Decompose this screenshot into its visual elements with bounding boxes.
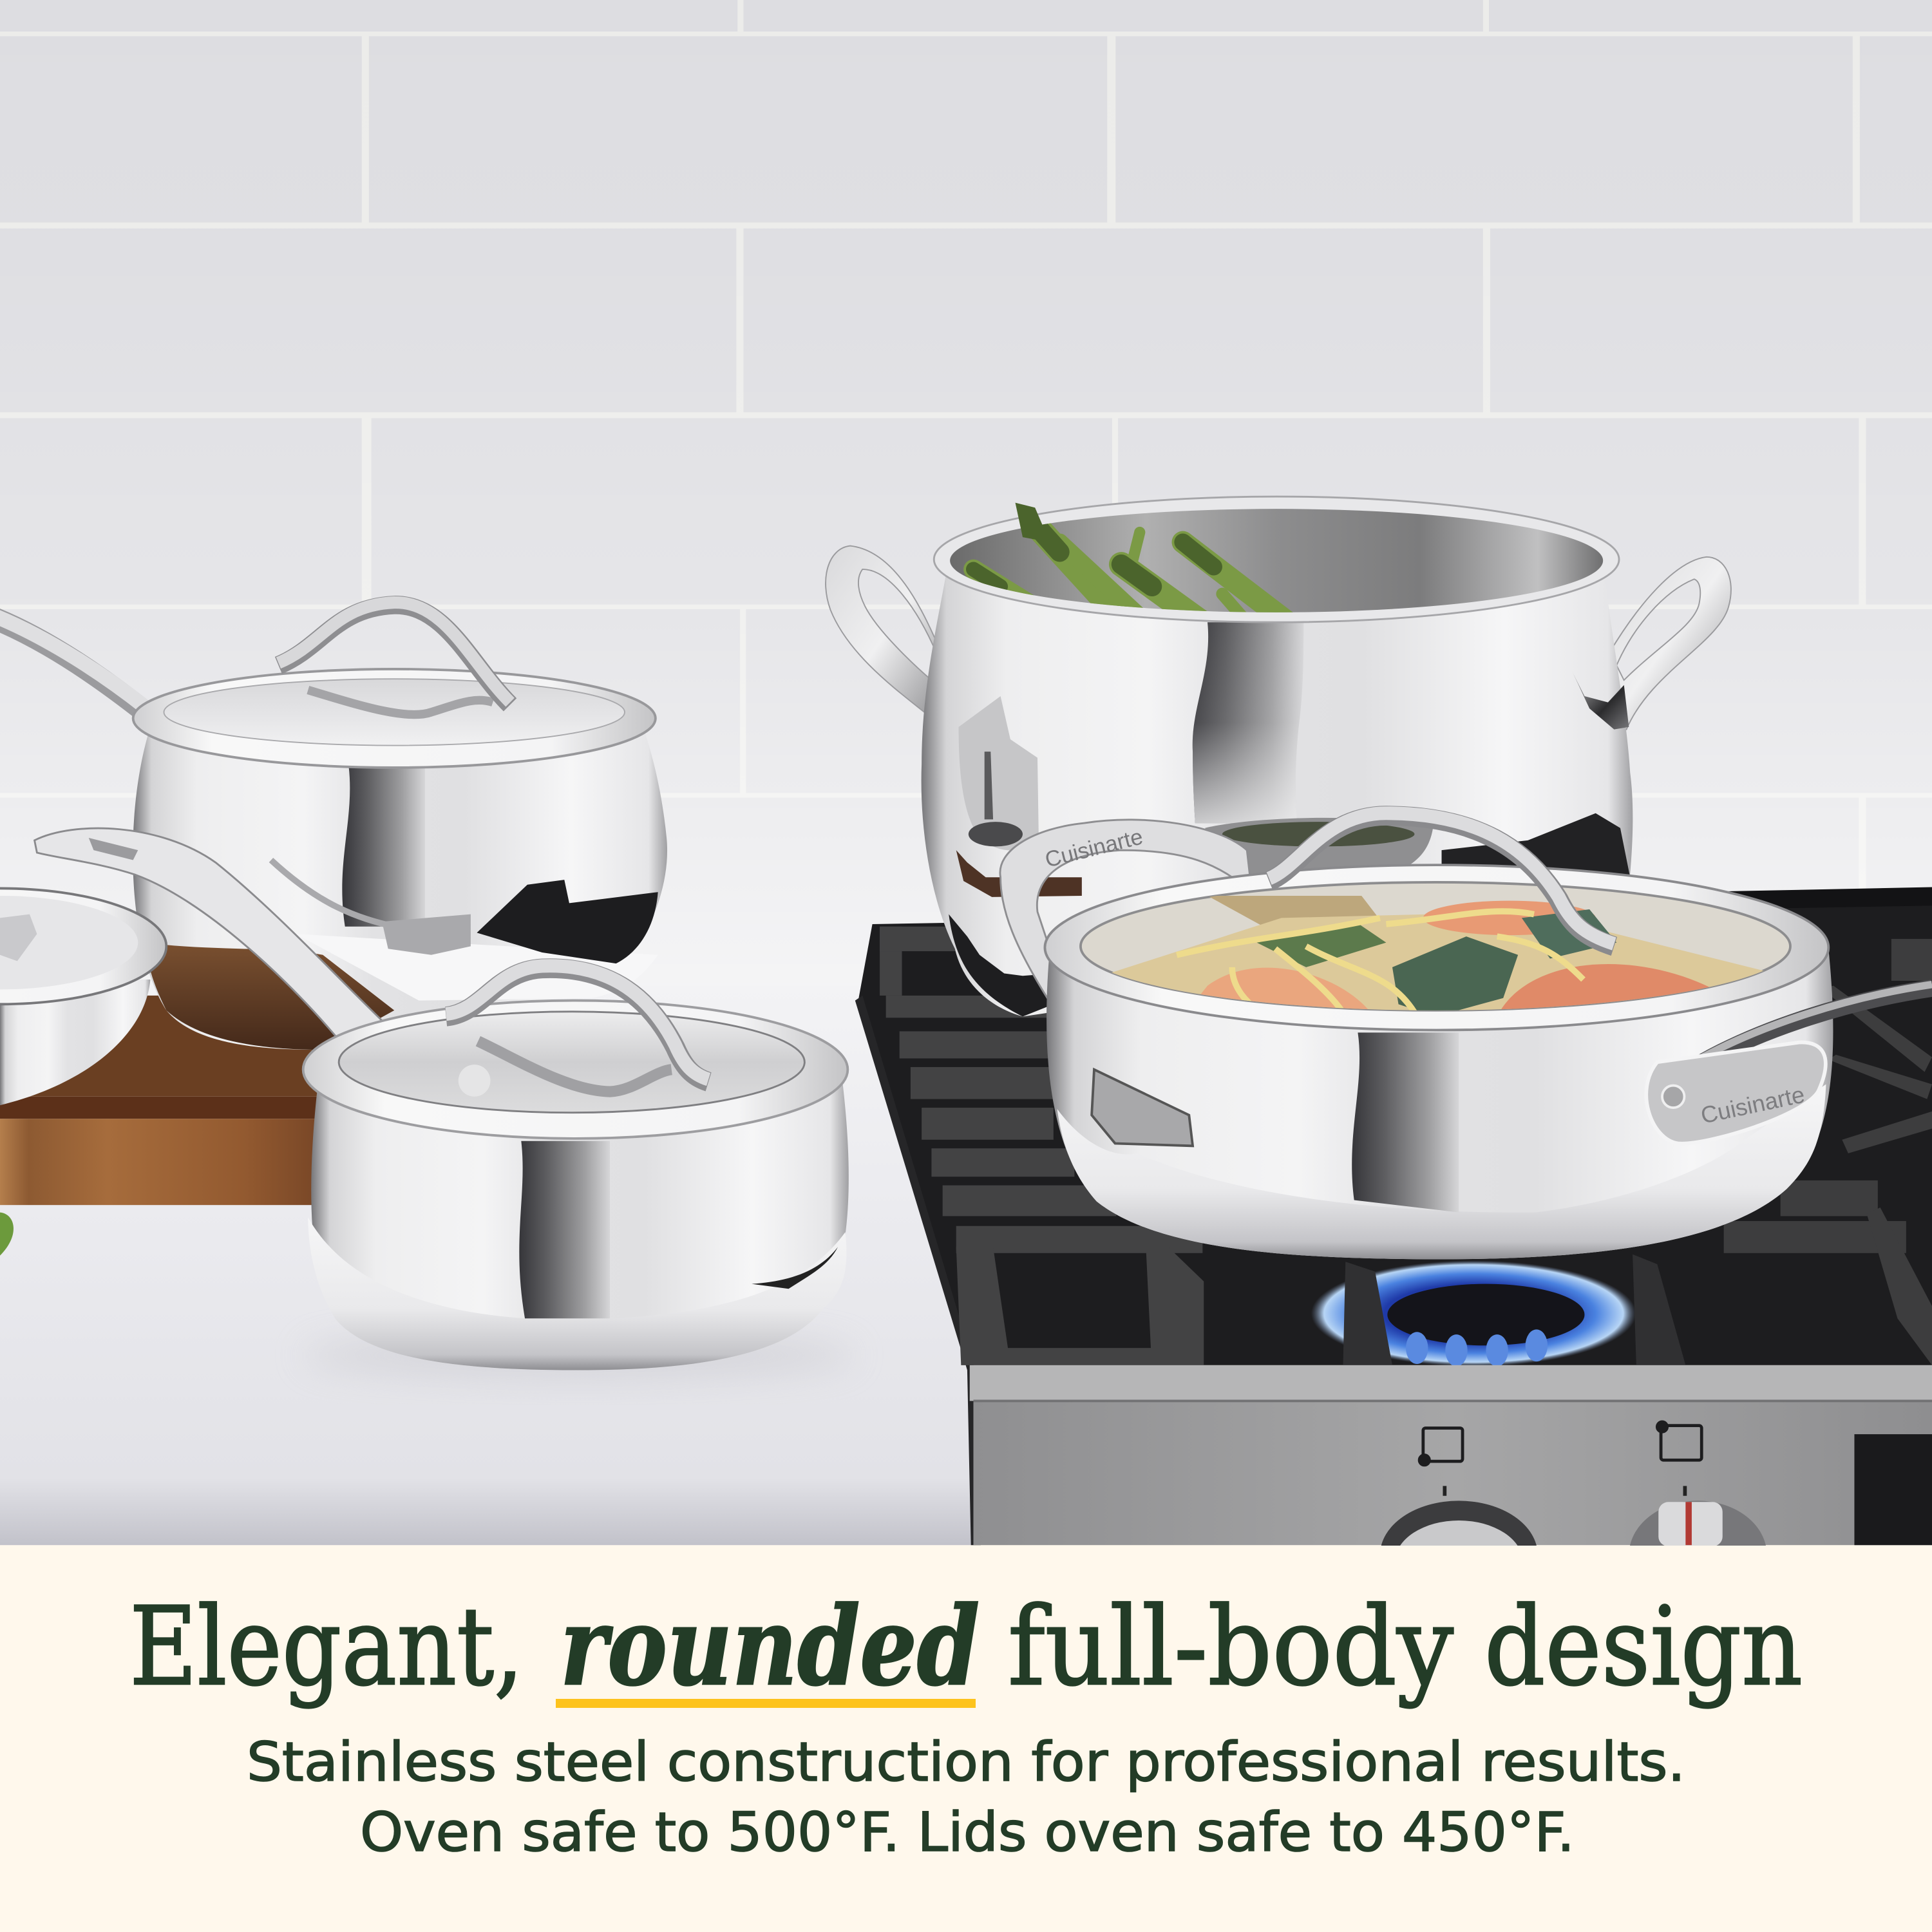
lid glass <box>1081 882 1790 1010</box>
burner flame <box>1311 1255 1685 1367</box>
reflection: wood sliver <box>956 850 1082 897</box>
heading: rounded <box>560 1582 980 1710</box>
lid <box>303 1001 848 1139</box>
leaf <box>0 1213 14 1256</box>
gas stove <box>855 887 1932 1545</box>
helper handle left <box>1000 820 1252 998</box>
stove front panel <box>970 1365 1932 1609</box>
reflection: base of burner <box>949 914 1054 1016</box>
side reflection <box>1092 1070 1193 1146</box>
handle plate <box>1646 1043 1826 1144</box>
dark tip of right handle <box>1572 672 1629 730</box>
asparagus <box>963 523 1293 612</box>
glass reflection <box>478 1041 672 1092</box>
knob left <box>1380 1486 1538 1609</box>
asparagus tips above rim <box>1016 503 1050 542</box>
lower body <box>1057 1084 1826 1259</box>
left saucepan <box>0 603 667 1050</box>
lid handle <box>1269 813 1614 946</box>
skillet left <box>0 888 166 1105</box>
shadow <box>302 1331 857 1380</box>
handle left <box>826 546 946 722</box>
lid rim <box>1045 865 1828 1030</box>
counter reflection <box>296 934 658 1001</box>
front saucepan <box>35 828 857 1380</box>
handle hole <box>89 838 138 860</box>
rim <box>934 497 1619 622</box>
dark band <box>342 766 425 927</box>
long handle <box>35 828 392 1047</box>
lid handle <box>278 603 510 705</box>
grate bars left <box>880 927 1204 1365</box>
subtext: Oven safe to 500°F. Lids oven safe to 450°F. <box>360 1801 1575 1864</box>
reflection of handle <box>271 860 394 927</box>
countertop <box>0 986 976 1545</box>
pot body <box>922 573 1633 1016</box>
wood reflection <box>146 943 394 1050</box>
lid handle <box>446 966 708 1082</box>
yellow underline <box>556 1699 976 1708</box>
lid <box>133 669 656 768</box>
body <box>1046 949 1833 1259</box>
subtext <box>247 1730 1685 1864</box>
grate bars right <box>1724 939 1932 1365</box>
handle right <box>1605 557 1731 730</box>
reflection: bowl with food <box>1205 818 1433 877</box>
brand mark: Cuisinarte <box>1698 1081 1807 1129</box>
food <box>1112 896 1763 1010</box>
dark band <box>519 1141 610 1318</box>
saute pan <box>1045 813 1932 1259</box>
subtext: Stainless steel construction for professional results. <box>247 1730 1685 1794</box>
dark reflection <box>752 1247 838 1289</box>
heading: full-body <box>1008 1584 1454 1710</box>
lower body <box>308 1217 846 1370</box>
stockpot <box>826 497 1731 1016</box>
body <box>133 727 667 1050</box>
long handle <box>0 616 146 712</box>
knob right <box>1629 1486 1767 1609</box>
icon: burner right <box>1657 1422 1701 1460</box>
icon: burner left <box>1419 1428 1463 1465</box>
reflection: small pot <box>959 696 1039 850</box>
long handle <box>1703 985 1932 1062</box>
reflection: stove lattice <box>1442 813 1630 877</box>
cutting board <box>0 996 357 1205</box>
heading: Elegant, <box>129 1584 524 1710</box>
heading: design <box>1484 1584 1803 1710</box>
stove reflection <box>477 880 658 963</box>
dark band <box>1352 1032 1459 1213</box>
display <box>1854 1434 1932 1545</box>
tiled wall <box>0 0 1932 998</box>
body <box>311 1084 849 1370</box>
reflection of small pot <box>382 914 471 955</box>
dark reflection band <box>1193 622 1303 823</box>
heading <box>129 1582 1803 1710</box>
glass reflection <box>308 690 493 715</box>
interior <box>950 509 1603 612</box>
brand mark on helper handle: Cuisinarte <box>1043 824 1146 873</box>
caption panel <box>0 1546 1932 1932</box>
rivet <box>1662 1086 1684 1108</box>
vent hole <box>459 1065 490 1097</box>
